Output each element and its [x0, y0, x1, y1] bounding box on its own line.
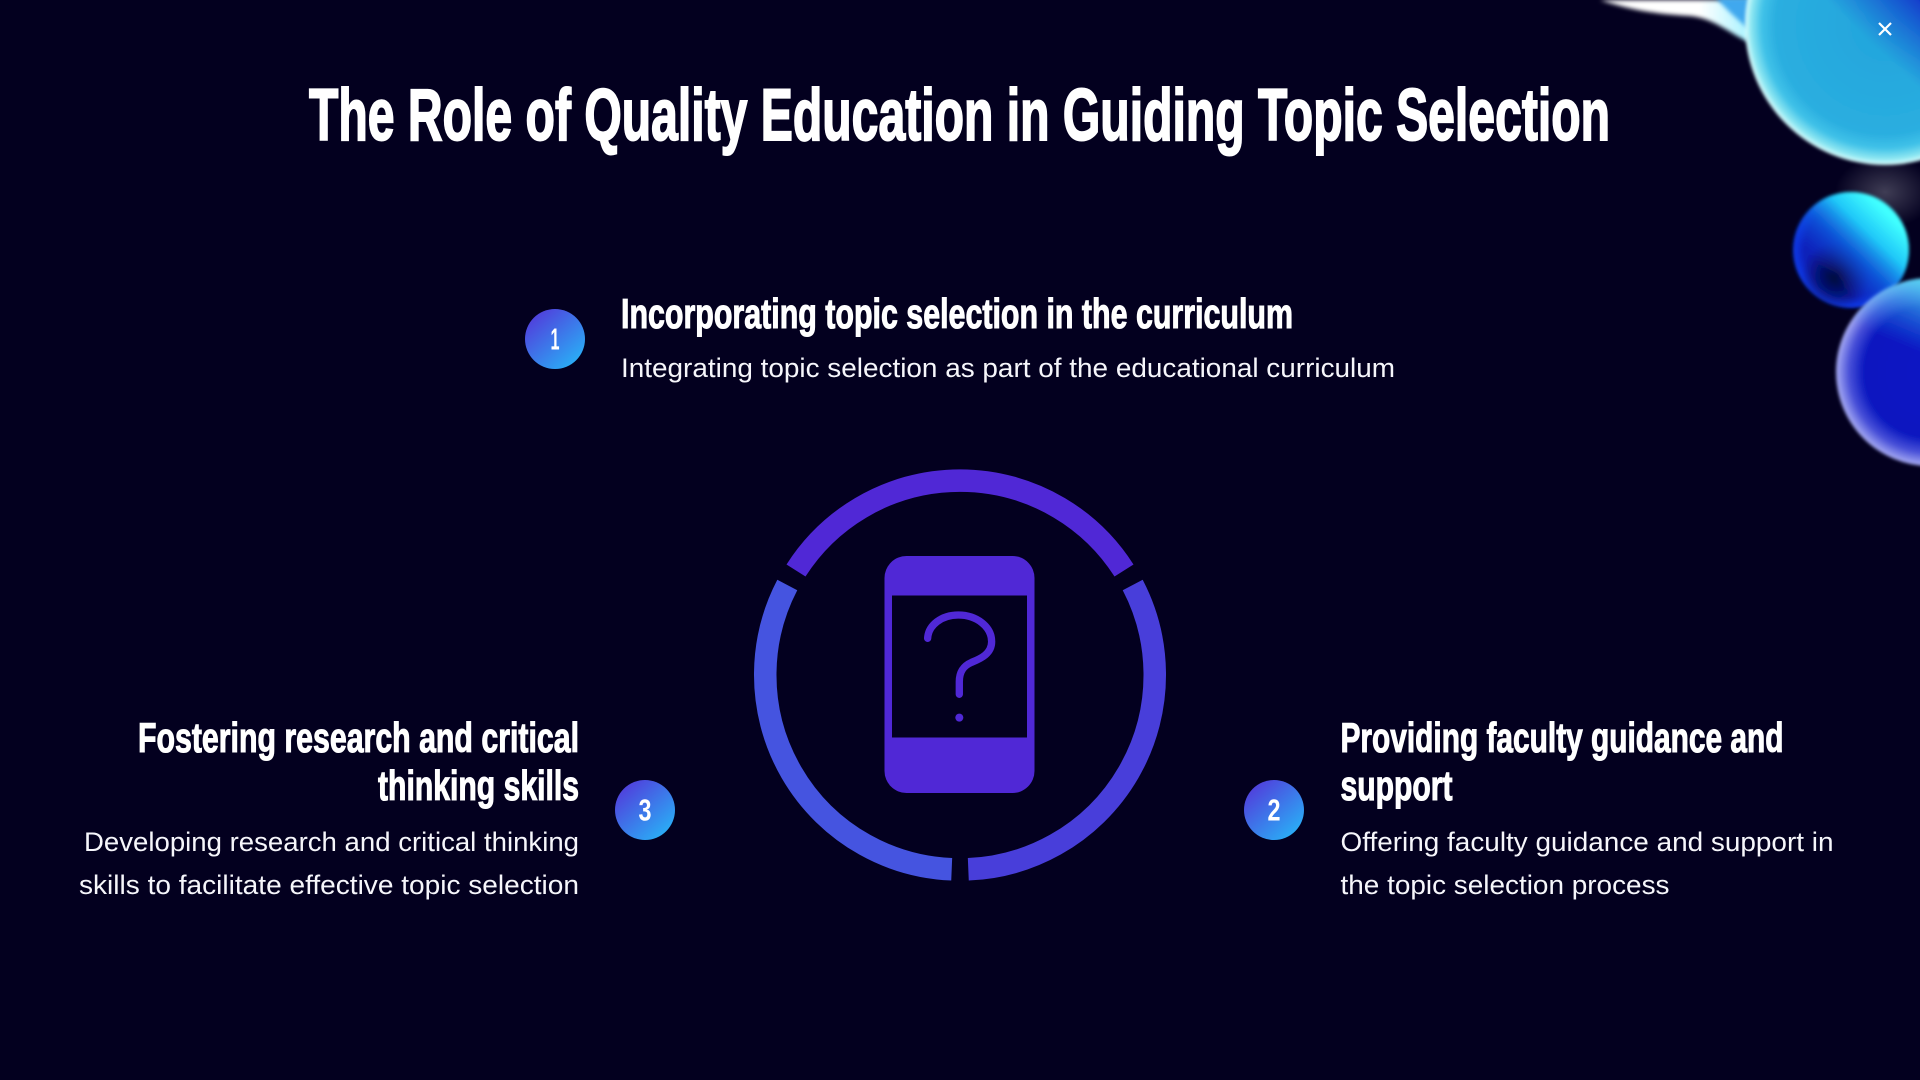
item 3: research — [79, 714, 675, 900]
text 2: the topic selection process — [1340, 870, 1670, 900]
ring diagram with phone icon — [765, 481, 1155, 869]
heading 3: Fostering research and critical — [138, 714, 579, 761]
badge 3 — [615, 780, 675, 840]
heading 3: thinking skills — [378, 762, 579, 809]
item 2: faculty — [1244, 714, 1834, 900]
badge 3: 3 — [638, 792, 652, 828]
text 3 — [79, 827, 579, 900]
heading 1: Incorporating topic selection in the curriculum — [621, 290, 1293, 337]
heading 2: support — [1340, 762, 1453, 809]
icon: phone with question mark — [884, 556, 1034, 793]
text 1: Integrating topic selection as part of the educational curriculum — [621, 353, 1395, 383]
ring segment: left — [765, 585, 952, 869]
decorative blobs — [1600, 0, 1920, 466]
badge 1 — [525, 309, 585, 369]
heading 3 — [138, 714, 579, 809]
badge 2 — [1244, 780, 1304, 840]
ring segment: top — [796, 481, 1124, 570]
text 2: Offering faculty guidance and support in — [1340, 827, 1834, 857]
text 3: Developing research and critical thinking — [84, 827, 579, 857]
heading 2 — [1340, 714, 1784, 809]
badge 1: 1 — [550, 322, 560, 356]
item 1: curriculum — [525, 290, 1395, 383]
ring segment: right — [968, 585, 1155, 869]
text 3: skills to facilitate effective topic selection — [79, 870, 579, 900]
text 2 — [1340, 827, 1834, 900]
icon: close button — [1879, 23, 1891, 35]
badge 2: 2 — [1268, 792, 1280, 828]
